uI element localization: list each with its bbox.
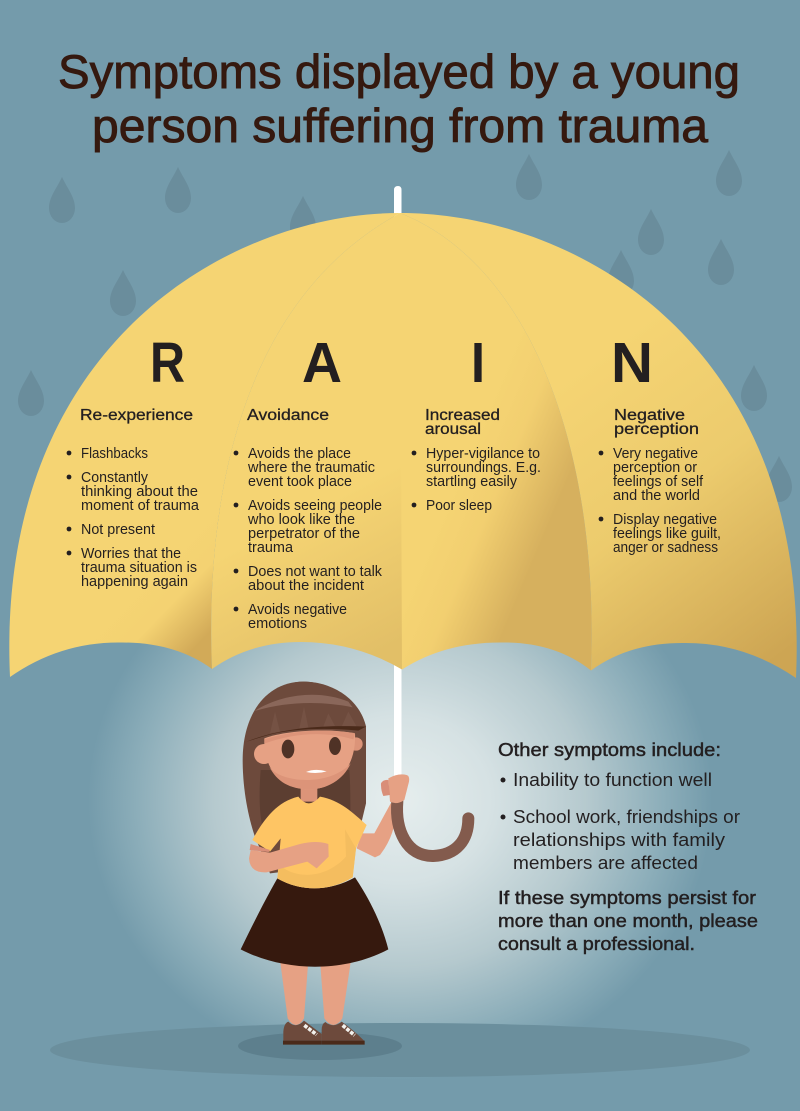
column: Increased arousal: surroundings. E.g. xyxy=(426,460,541,476)
letter N: N xyxy=(611,331,653,395)
column: Increased arousal: arousal xyxy=(425,421,481,438)
column: Negative perception: feelings of self xyxy=(613,474,704,490)
column: Negative perception: perception or xyxy=(613,460,697,476)
panel: centre left canopy xyxy=(211,213,402,670)
skirt xyxy=(241,877,388,967)
left arm and fist xyxy=(249,842,329,872)
title: person suffering from trauma xyxy=(92,99,709,152)
column: Re-experience: Re-experience xyxy=(80,407,193,424)
column: Re-experience: Flashbacks xyxy=(81,446,148,462)
column: Increased arousal xyxy=(412,407,541,514)
column: Increased arousal: Increased xyxy=(425,407,500,424)
column: Avoidance: who look like the xyxy=(247,512,355,528)
column: Avoidance: perpetrator of the xyxy=(248,526,360,542)
column: Re-experience: moment of trauma xyxy=(81,498,200,514)
column: Avoidance: Avoids negative xyxy=(248,602,347,618)
right arm to handle xyxy=(357,802,396,857)
other symptoms text block xyxy=(498,740,758,954)
column: Avoidance: where the traumatic xyxy=(247,460,375,476)
column: Avoidance: event took place xyxy=(248,474,352,490)
column: Negative perception: Display negative xyxy=(613,512,717,528)
column: Re-experience xyxy=(67,407,200,590)
column: Avoidance xyxy=(234,407,383,632)
column: Avoidance: Avoidance xyxy=(247,407,329,424)
letter A: A xyxy=(302,331,342,395)
column: Avoidance: Avoids the place xyxy=(248,446,351,462)
column: Avoidance: about the incident xyxy=(248,578,364,594)
girl shadow xyxy=(238,1032,402,1060)
column: Re-experience: happening again xyxy=(81,574,188,590)
other symptoms text block: more than one month, please xyxy=(498,911,758,931)
umbrella canopy xyxy=(9,213,797,678)
panel: left canopy xyxy=(9,213,400,677)
column: Negative perception: and the world xyxy=(613,488,700,504)
other symptoms text block: If these symptoms persist for xyxy=(498,888,756,908)
column: Avoidance: Does not want to talk xyxy=(248,564,383,580)
other symptoms text block: consult a professional. xyxy=(498,934,695,954)
shirt xyxy=(252,797,367,888)
column: Re-experience: thinking about the xyxy=(81,484,198,500)
column: Negative perception xyxy=(599,407,721,556)
hand on handle xyxy=(381,774,409,803)
column: Re-experience: Constantly xyxy=(81,470,149,486)
girl holding umbrella handle xyxy=(241,682,468,1045)
title xyxy=(58,45,740,152)
column: Increased arousal: Hyper-vigilance to xyxy=(426,446,540,462)
hair back xyxy=(243,682,366,873)
column: Re-experience: Worries that the xyxy=(81,546,181,562)
shoes xyxy=(283,1021,365,1045)
column: Increased arousal: startling easily xyxy=(426,474,518,490)
column: Negative perception: perception xyxy=(614,421,699,438)
column: Avoidance: emotions xyxy=(248,616,307,632)
panel: right canopy xyxy=(400,213,797,678)
neck xyxy=(301,783,317,802)
column: Re-experience: trauma situation is xyxy=(81,560,197,576)
letter I: I xyxy=(471,331,485,395)
column: Negative perception: anger or sadness xyxy=(613,540,718,556)
other symptoms text block: relationships with family xyxy=(513,830,725,850)
column: Increased arousal: Poor sleep xyxy=(426,498,492,514)
other symptoms text block: School work, friendships or xyxy=(513,807,740,827)
other symptoms text block: Inability to function well xyxy=(513,770,712,790)
panel: centre right canopy xyxy=(400,213,592,670)
column: Avoidance: trauma xyxy=(248,540,294,556)
column: Negative perception: Very negative xyxy=(613,446,698,462)
ground shadow xyxy=(50,1023,750,1077)
title: Symptoms displayed by a young xyxy=(58,45,740,98)
other symptoms text block: members are affected xyxy=(513,853,698,873)
umbrella handle xyxy=(397,802,468,856)
column: Negative perception: Negative xyxy=(614,407,685,424)
legs xyxy=(280,960,351,1025)
column: Negative perception: feelings like guilt, xyxy=(613,526,721,542)
head xyxy=(254,731,363,789)
hair shadow xyxy=(260,770,350,860)
umbrella pole xyxy=(394,186,402,790)
column: Avoidance: Avoids seeing people xyxy=(248,498,382,514)
light glow behind the girl xyxy=(88,520,712,1080)
rain drops xyxy=(18,150,792,502)
other symptoms text block: Other symptoms include: xyxy=(498,740,721,760)
letter R: R xyxy=(150,331,185,395)
fringe xyxy=(247,682,366,742)
column: Re-experience: Not present xyxy=(81,522,155,538)
